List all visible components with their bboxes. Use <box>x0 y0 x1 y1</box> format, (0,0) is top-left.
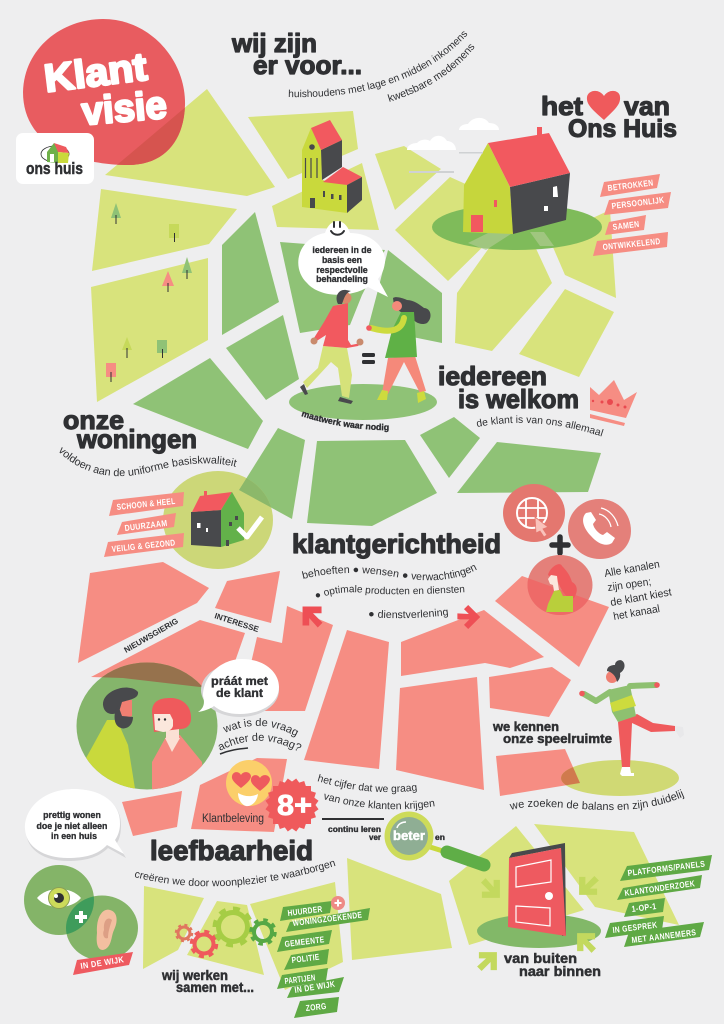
map: lime neighbourhood blocks <box>91 89 616 402</box>
ribbons: partners: GEMEENTE <box>284 934 325 949</box>
heading: onze woningen: onze <box>63 405 124 435</box>
logo: ons huis: ons huis <box>26 159 83 178</box>
speech bubble: respectvolle behandeling: iedereen in de <box>312 245 372 255</box>
curved subtext: balans: we zoeken de balans en zijn duidelijk <box>510 789 684 810</box>
icon: red-haired woman in circle <box>528 555 592 615</box>
ribbons: partners: ZORG <box>305 1001 327 1013</box>
eye <box>37 889 81 907</box>
ribbons: research channels: KLANTONDERZOEK <box>624 878 696 898</box>
ear <box>97 910 117 950</box>
speech bubble: prettig wonen: prettig wonen <box>43 810 101 820</box>
ribbons: research channels: 1-OP-1 <box>631 901 657 914</box>
ribbons: research channels: IN GESPREK <box>612 920 658 935</box>
heading: klantgerichtheid: klantgerichtheid <box>292 529 501 559</box>
speech bubble: praat met de klant <box>198 659 279 717</box>
ribbons: partners: HUURDER <box>287 904 323 918</box>
road labels <box>122 611 261 655</box>
badge: score 8+: 8+ <box>277 790 312 822</box>
ribbons: values: ONTWIKKELEND <box>602 236 661 252</box>
heading: we kennen onze speelruimte <box>492 719 612 746</box>
curved subtext: leefbaarheid: creëren we door woonplezier te waarborgen <box>135 860 336 888</box>
heading: het hart van Ons Huis: van <box>624 91 670 121</box>
curved list: klantgerichtheid: ● dienstverlening <box>369 608 448 618</box>
illustration: balancing person <box>561 660 679 796</box>
map: lime blocks lower part <box>143 824 679 990</box>
ribbons: partners: IN DE WIJK <box>294 979 336 995</box>
text: alle kanalen <box>603 558 673 623</box>
heading: iedereen is welkom: is welkom <box>458 384 579 414</box>
curved text: het cijfer <box>318 774 435 811</box>
illustration: conversation circle <box>76 662 218 790</box>
curved text: vraag achter de vraag <box>218 718 302 755</box>
illustration: two people on oval <box>289 290 437 420</box>
man with beard <box>86 720 135 788</box>
ribbons: house qualities <box>104 492 184 557</box>
heading: iedereen is welkom: iedereen <box>438 361 547 391</box>
text: continu leren verbeteren: en <box>435 833 445 842</box>
curved subtext: klant is van ons allemaal: de klant is van ons allemaal <box>476 415 604 436</box>
icon: crown <box>590 380 637 426</box>
text: continu leren verbeteren <box>322 818 445 842</box>
icon: eye and ear circles <box>24 865 138 960</box>
text: alle kanalen: de klant kiest <box>609 586 673 609</box>
curved label: maatwerk waar nodig: maatwerk waar nodig <box>301 412 389 432</box>
text: continu leren verbeteren: ver <box>369 833 381 842</box>
icon: magnifier beter: beter <box>393 828 425 843</box>
ribbons: values: BETROKKEN <box>607 177 654 193</box>
heading: van buiten naar binnen <box>504 950 601 979</box>
ribbons: values: PERSOONLIJK <box>611 195 665 211</box>
woman <box>366 297 431 403</box>
heading: leefbaarheid: leefbaarheid <box>150 835 313 866</box>
heading: van buiten naar binnen: van buiten <box>504 950 577 966</box>
curved subtext: basiskwaliteit: voldoen aan de uniforme basiskwaliteit <box>60 447 237 476</box>
man <box>300 290 364 404</box>
icon: globe in circle <box>503 484 565 542</box>
curved list: klantgerichtheid: ● optimale producten en diensten <box>316 585 464 598</box>
illustration: main house <box>432 127 602 250</box>
ribbons: house qualities: VEILIG & GEZOND <box>111 537 176 554</box>
icon: phone in circle <box>568 499 631 559</box>
heading: onze woningen: woningen <box>76 424 197 454</box>
arrow: right red <box>454 604 480 630</box>
curved text: vraag achter de vraag: wat is de vraag <box>223 718 298 738</box>
road labels: NIEUWSGIERIG <box>122 616 180 655</box>
illustration: small house with check <box>163 471 273 569</box>
text: wij werken samen met: samen met... <box>176 979 254 995</box>
ribbons: partners <box>277 896 370 1018</box>
ribbons: values: SAMEN <box>612 219 640 232</box>
badge: score 8+ <box>265 778 319 832</box>
ribbon: in de wijk <box>73 952 133 975</box>
curved text: het cijfer: van onze klanten krijgen <box>324 794 435 811</box>
speech bubble: prettig wonen <box>25 789 126 861</box>
speech bubble: respectvolle behandeling: basis een <box>322 255 362 265</box>
title blob: visie <box>80 84 168 134</box>
arrow: left red <box>303 607 322 627</box>
trees <box>106 203 192 382</box>
heading: van buiten naar binnen: naar binnen <box>519 963 601 979</box>
icon: equals sign <box>362 353 375 364</box>
icon: plus badge <box>331 896 345 910</box>
ribbons: partners: PARTIJEN <box>284 972 316 986</box>
map: green neighbourhood blocks <box>133 212 601 526</box>
icon: gears <box>176 908 275 956</box>
curved subtext: target groups: huishoudens met lage en midden inkomens <box>288 31 468 98</box>
ribbons: research channels: MET AANNEMERS <box>631 927 697 945</box>
icon: smiley <box>331 222 344 235</box>
curved list: klantgerichtheid: behoeften ● wensen ● verwachtingen <box>302 565 477 580</box>
text: alle kanalen: het kanaal <box>612 603 661 623</box>
text: wij werken samen met: wij werken <box>161 967 228 983</box>
icon: plus <box>552 537 568 553</box>
logo: ons huis <box>16 133 94 184</box>
heading: iedereen is welkom <box>438 361 579 414</box>
road labels: INTERESSE <box>213 611 261 634</box>
ribbons: partners: WONINGZOEKENDE <box>292 910 363 928</box>
speech bubble: respectvolle behandeling: respectvolle <box>316 265 368 275</box>
arrows: toward the door <box>477 876 599 971</box>
text: continu leren verbeteren: continu leren <box>328 825 381 834</box>
speech bubble: praat met de klant: de klant <box>216 686 263 700</box>
curved text: vraag achter de vraag: achter de vraag? <box>218 732 302 751</box>
ribbon: in de wijk: IN DE WIJK <box>80 954 125 971</box>
heading: wij zijn er voor <box>231 28 362 80</box>
heading: we kennen onze speelruimte: we kennen <box>492 719 559 734</box>
icon: heart <box>587 91 620 120</box>
text: wij werken samen met <box>161 967 254 995</box>
heading: het hart van Ons Huis: Ons Huis <box>568 115 677 143</box>
ribbons: research channels <box>605 855 712 947</box>
plus <box>75 911 87 923</box>
heading: onze woningen <box>63 405 197 454</box>
ribbons: partners: POLITIE <box>291 952 320 965</box>
icon: check mark <box>238 517 262 537</box>
icon: magnifier beter <box>384 812 484 865</box>
ribbons: house qualities: DUURZAAM <box>124 518 168 533</box>
illustration: door on oval <box>477 843 601 948</box>
title text: Klant <box>42 46 149 101</box>
heading: wij zijn er voor: er voor... <box>253 50 362 80</box>
heading: het hart van Ons Huis <box>541 91 677 143</box>
speech bubble: respectvolle behandeling <box>298 221 388 297</box>
title blob <box>23 19 186 165</box>
ribbons: values <box>593 174 671 256</box>
curved list: klantgerichtheid <box>302 565 477 618</box>
icon: emoji heart eyes <box>226 760 272 806</box>
ribbons: house qualities: SCHOON & HEEL <box>116 496 176 512</box>
speech bubble: prettig wonen: doe je niet alleen <box>37 821 107 831</box>
heading: we kennen onze speelruimte: onze speelruimte <box>503 731 612 746</box>
speech bubble: prettig wonen: in een huis <box>51 831 97 841</box>
heading: het hart van Ons Huis: het <box>541 91 583 121</box>
label: klantbeleving: Klantbeleving <box>202 813 264 825</box>
curved text: het cijfer: het cijfer dat we graag <box>318 774 417 794</box>
icon: church building <box>302 120 362 213</box>
text: alle kanalen: Alle kanalen <box>603 558 661 580</box>
woman with red hair <box>152 735 202 790</box>
ribbons: research channels: PLATFORMS/PANELS <box>627 859 706 878</box>
map: coral neighbourhood blocks <box>78 562 609 836</box>
speech bubble: praat met de klant: práát met <box>211 674 268 688</box>
curved subtext: target groups: kwetsbare medemens <box>388 44 474 102</box>
speech bubble: respectvolle behandeling: behandeling <box>316 274 368 284</box>
clouds <box>407 118 499 173</box>
text: alle kanalen: zijn open; <box>607 576 652 594</box>
heading: wij zijn er voor: wij zijn <box>231 28 317 58</box>
